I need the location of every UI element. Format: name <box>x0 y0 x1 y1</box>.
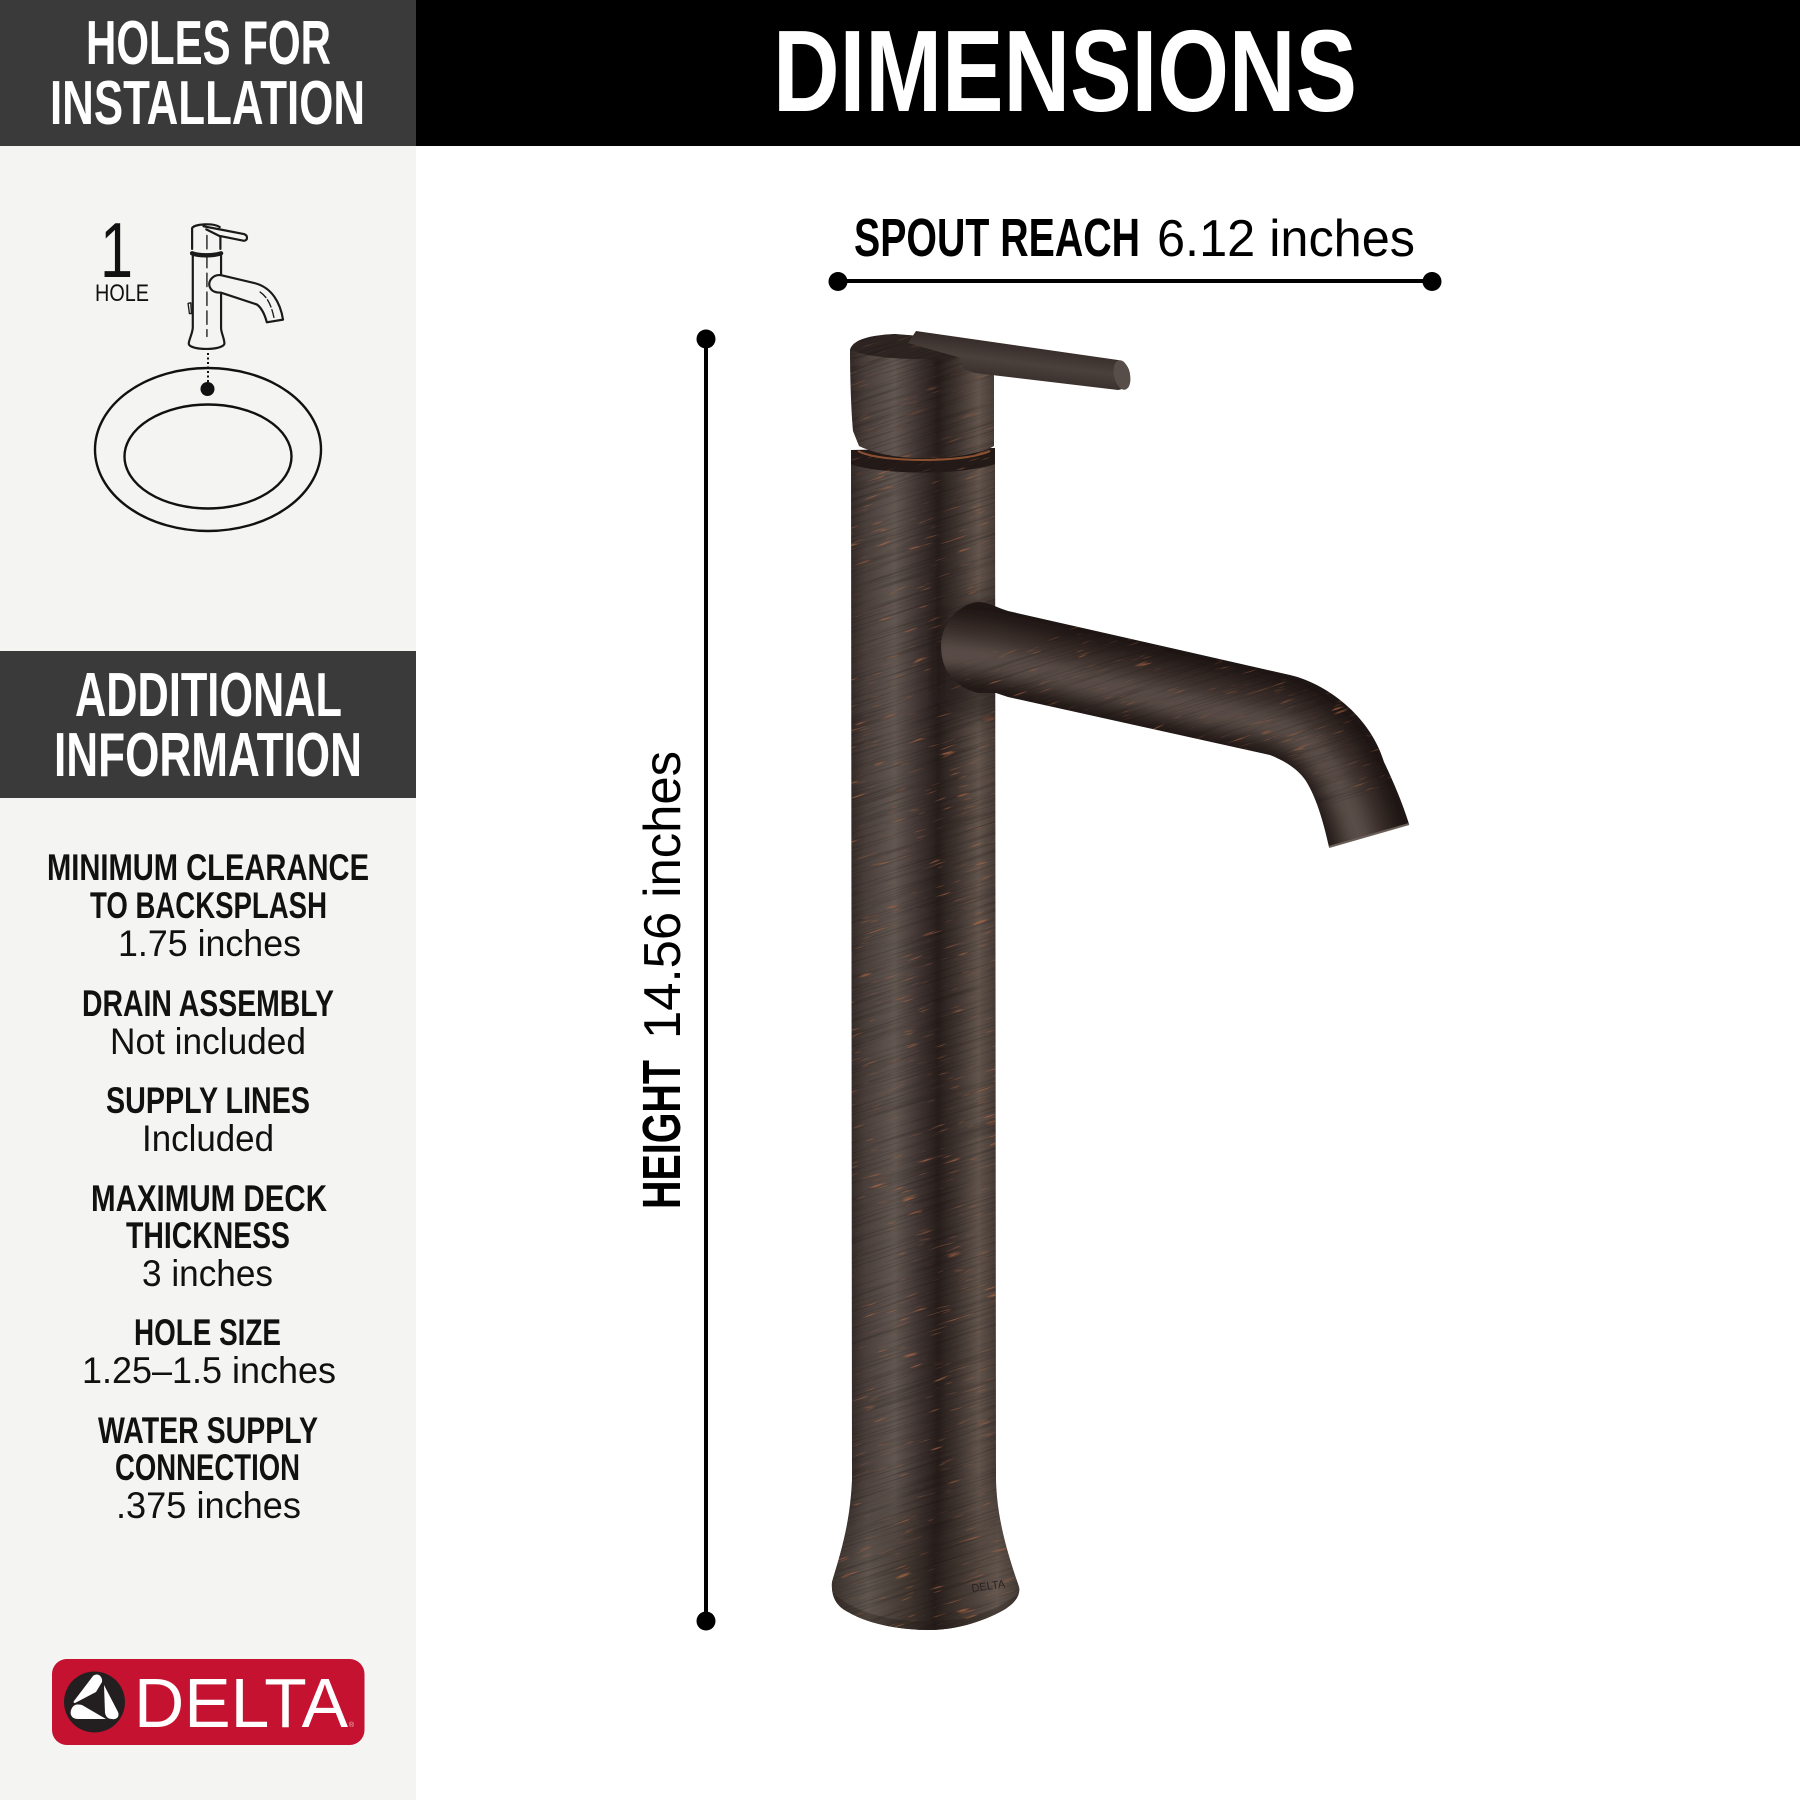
heading: holes for installation: HOLES FOR <box>86 9 331 78</box>
text block: supply lines <box>106 1080 310 1159</box>
dimension: height: HEIGHT <box>632 1060 692 1209</box>
faucet body: DELTA <box>971 1578 1007 1595</box>
dimension: spout reach: 6.12 inches <box>1157 210 1415 268</box>
text block: maximum deck thickness <box>91 1178 327 1294</box>
text block: minimum clearance: MINIMUM CLEARANCE <box>47 847 369 888</box>
spout <box>941 602 1409 847</box>
text block: minimum clearance: TO BACKSPLASH <box>90 885 327 926</box>
icon: one hole label: 1 <box>100 206 133 294</box>
text block: water supply connection: WATER SUPPLY <box>98 1410 318 1451</box>
panel: sidebar <box>0 0 416 1800</box>
text block: hole size <box>82 1312 336 1391</box>
icon: faucet line drawing <box>188 224 283 349</box>
dimension: spout reach <box>828 208 1442 291</box>
faucet body <box>832 448 1020 1630</box>
heading: additional information: INFORMATION <box>54 721 362 790</box>
text block: drain assembly: DRAIN ASSEMBLY <box>82 983 334 1024</box>
text block: hole size: 1.25–1.5 inches <box>82 1350 336 1391</box>
heading: dimensions banner <box>416 0 1800 146</box>
faucet head <box>850 334 994 458</box>
text block: maximum deck thickness: 3 inches <box>142 1253 273 1294</box>
text block: supply lines: Included <box>142 1118 274 1159</box>
text block: water supply connection: CONNECTION <box>115 1447 300 1488</box>
heading: additional information: ADDITIONAL <box>75 661 342 730</box>
icon: delta logo: ® <box>349 1721 355 1729</box>
spout tip highlight <box>1329 824 1409 847</box>
heading: holes for installation: INSTALLATION <box>50 69 365 138</box>
heading: additional information <box>0 651 416 798</box>
dimension: spout reach: SPOUT REACH <box>854 208 1140 268</box>
icon: sink basin with hole <box>95 353 321 531</box>
text block: hole size: HOLE SIZE <box>134 1312 281 1353</box>
text block: water supply connection: .375 inches <box>116 1485 301 1526</box>
icon: one hole label: HOLE <box>95 280 149 307</box>
text block: drain assembly <box>82 983 334 1062</box>
icon: delta logo <box>52 1659 364 1745</box>
handle lever <box>908 331 1133 391</box>
text block: maximum deck thickness: THICKNESS <box>126 1215 290 1256</box>
heading: dimensions banner: DIMENSIONS <box>773 6 1357 136</box>
text block: supply lines: SUPPLY LINES <box>106 1080 310 1121</box>
text block: minimum clearance <box>47 847 369 964</box>
dimension: height <box>632 330 716 1630</box>
heading: holes for installation <box>0 0 416 146</box>
dimension: height: 14.56 inches <box>634 751 692 1039</box>
text block: maximum deck thickness: MAXIMUM DECK <box>91 1178 327 1219</box>
text block: minimum clearance: 1.75 inches <box>118 923 301 964</box>
text block: drain assembly: Not included <box>110 1021 306 1062</box>
text block: water supply connection <box>98 1410 318 1526</box>
faucet photo <box>832 331 1410 1630</box>
icon: delta logo: DELTA <box>134 1664 348 1742</box>
